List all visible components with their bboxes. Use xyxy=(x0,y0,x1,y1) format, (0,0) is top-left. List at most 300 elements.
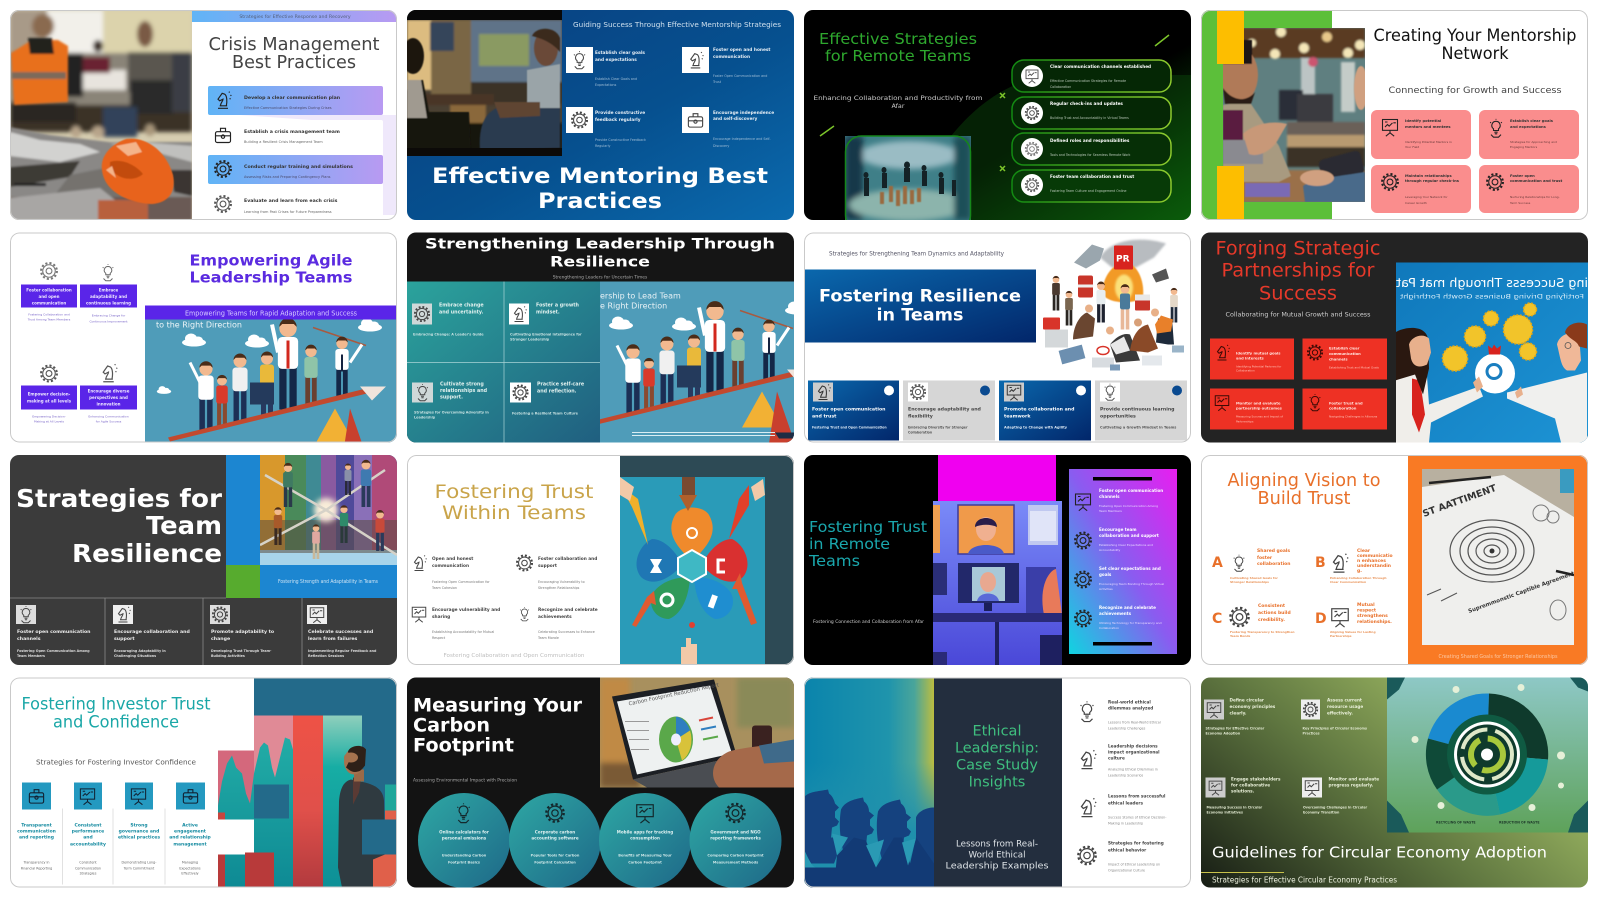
item: lessons: Lessons from successful xyxy=(1108,794,1166,798)
item: collaboration: Trust Among Team Members xyxy=(27,318,71,322)
item B: clear communication: understandin xyxy=(1357,563,1391,569)
item: stakeholders xyxy=(1206,776,1281,814)
item: governance: Term Commitment xyxy=(123,866,155,870)
item: outcomes: Measuring Success and Impact of xyxy=(1236,414,1284,418)
item: collaboration: Encourage collaboration and xyxy=(114,629,190,635)
subtitle: Connecting for Growth and Success xyxy=(1388,86,1562,96)
item: celebrate: Celebrate successes and xyxy=(308,629,373,635)
item: dilemmas: Real-world ethical xyxy=(1108,700,1151,704)
title: Resilience xyxy=(72,539,222,568)
item: change: Embrace change xyxy=(439,302,484,308)
item: trust: Navigating Challenges in Alliances xyxy=(1329,414,1378,418)
item: communication xyxy=(1302,338,1387,380)
item D: mutual respect: Aligning Values for Lasting xyxy=(1330,630,1376,634)
photo: mentor and mentee by a window xyxy=(407,10,562,156)
title: Effective Mentoring Best xyxy=(432,164,768,189)
item: mentors xyxy=(1371,110,1471,159)
title: for Remote Teams xyxy=(825,47,971,65)
item: goals: and expectations xyxy=(595,57,637,63)
item: define principles: Strategies for Effective Circular xyxy=(1206,726,1265,730)
subtitle: Fostering Strength and Adaptability in Teams xyxy=(278,579,378,585)
item A: shared goals: Shared goals xyxy=(1257,548,1290,554)
item: adaptability: Continuous Improvement xyxy=(89,320,128,324)
illustration: team on a rising arrow xyxy=(145,320,397,442)
item: growth mindset: Stronger Leadership xyxy=(510,338,550,342)
item: mentors: Your Field xyxy=(1405,145,1419,149)
illustration: video call desk scene xyxy=(933,501,1062,665)
item: governance: Demonstrating Long- xyxy=(122,860,157,864)
item: communication: channels xyxy=(1329,358,1348,362)
item: corporate software: Corporate carbon xyxy=(535,830,575,834)
item: achievements: Team Morale xyxy=(537,636,559,640)
item: strategies: Strategies for fostering xyxy=(1108,840,1164,846)
illustration: team on a rising arrow: to the Right Direction xyxy=(156,320,242,330)
strategies panel xyxy=(1069,469,1177,654)
item: adaptability: Building Activities xyxy=(211,654,245,658)
title: Insights xyxy=(969,774,1025,790)
item: honest communication xyxy=(414,556,490,590)
item: adaptability: Promote adaptability to xyxy=(211,629,275,635)
image: silhouettes on gradient xyxy=(804,678,934,888)
item: stakeholders: Economy Initiatives xyxy=(1206,810,1243,814)
subtitle: Strategies for Fostering Investor Confidence xyxy=(36,758,196,766)
item: honest communication: Team Cohesion xyxy=(431,586,457,590)
item: performance: Communication xyxy=(75,866,101,870)
item: growth mindset: Foster a growth xyxy=(536,302,580,308)
item: define principles: economy principles xyxy=(1230,704,1276,709)
item: decisions: Empower decision- xyxy=(28,392,71,396)
panel: Fostering Trust Within Teams slide xyxy=(407,455,794,665)
panel: Fostering Trust in Remote Teams slide xyxy=(804,455,1191,665)
item: goals: Establish Clear Goals and xyxy=(595,77,637,81)
item: achievements: achievements xyxy=(1099,611,1132,616)
item: online calculators: Understanding Carbon xyxy=(442,854,487,858)
item: online calculators: Footprint Basics xyxy=(448,860,480,864)
item: celebrate: learn from failures xyxy=(308,636,358,642)
item: goals xyxy=(566,47,645,87)
panel: Guidelines for Circular Economy Adoption slide xyxy=(1201,678,1588,888)
item: self-care: Practice self-care xyxy=(537,382,585,388)
item: performance: Consistent xyxy=(74,822,102,828)
item: corporate software: Popular Tools for Carbon xyxy=(531,854,580,858)
subtitle: Fostering Connection and Collaboration from Afar xyxy=(813,619,924,625)
item B: clear communication: Clear xyxy=(1357,548,1371,554)
item: achievements xyxy=(1075,605,1162,630)
photo: man in conversation in a cafe xyxy=(1223,28,1365,202)
title: Resilience xyxy=(550,254,650,270)
item: expectations: Set clear expectations and xyxy=(1099,566,1161,571)
item: learning: opportunities xyxy=(1100,414,1136,420)
item B: clear communication xyxy=(1315,548,1393,584)
item: communication: Establishing Trust and Mutual Goals xyxy=(1329,366,1379,370)
item: communication: Foster open communication xyxy=(17,629,91,635)
item: adaptability: Collaboration xyxy=(908,430,933,434)
item: crisis team xyxy=(214,120,383,144)
item: goals: Establish clear goals xyxy=(595,50,645,56)
item: assess resources: Assess current xyxy=(1327,698,1362,702)
item: collaboration xyxy=(517,555,597,590)
item: assess resources: effectively. xyxy=(1327,710,1353,716)
item: mentors: Identifying Potential Mentors in xyxy=(1405,140,1452,144)
item: collaboration: support xyxy=(114,636,135,642)
infographic image: circular economy wheel: RECYCLING OF WASTE xyxy=(1436,820,1476,824)
item: achievements: Recognize and celebrate xyxy=(1099,605,1156,610)
item: monitor progress xyxy=(1302,776,1379,814)
subtitle band: Empowering Teams for Rapid Adaptation and Success xyxy=(185,310,357,318)
item: lessons xyxy=(1082,794,1167,826)
item C: consistent actions xyxy=(1212,603,1294,638)
item: adaptability: Embracing Change for xyxy=(92,314,126,318)
item: evaluate xyxy=(214,195,338,214)
panel: Fostering Resilience in Teams slide xyxy=(804,232,1191,442)
item: collaboration: Foster collaboration xyxy=(26,288,72,292)
item: performance: Consistent xyxy=(79,860,97,864)
panel: Creating Your Mentorship Network slide xyxy=(1201,10,1588,220)
item: decisions xyxy=(21,366,77,424)
item D: mutual respect: D xyxy=(1315,611,1327,627)
item: achievements: achievements xyxy=(538,614,572,620)
item: collaboration: Establishing Clear Expectations and xyxy=(1099,543,1153,547)
item: relationships xyxy=(412,382,489,420)
item C: consistent actions: Fostering Transparency to Strengthen xyxy=(1230,630,1294,634)
item: communication: Team Members xyxy=(17,654,45,658)
item: teamwork: teamwork xyxy=(1004,414,1031,420)
item: communication: Team Members xyxy=(1098,509,1122,513)
item: goals xyxy=(1479,110,1579,159)
item: define principles: clearly. xyxy=(1230,710,1247,716)
item: reporting: Transparency in xyxy=(22,860,50,864)
item: relationships: Strategies for Overcoming Adversity in xyxy=(414,410,489,414)
item: engagement: engagement xyxy=(174,828,207,834)
item: self-care: and reflection. xyxy=(537,388,577,394)
item: decisions: making at all levels xyxy=(27,398,72,404)
item: communication: Fostering Trust and Open Communication xyxy=(812,426,887,430)
panel: Crisis Management Best Practices slide xyxy=(10,10,397,220)
item: goals: and expectations xyxy=(1510,125,1547,129)
item: lessons: Success Stories of Ethical Decision- xyxy=(1108,816,1167,820)
item: collaboration: Encouraging Vulnerability to xyxy=(538,580,585,584)
item: relationships: Cultivate strong xyxy=(440,382,484,388)
item: vulnerability: sharing xyxy=(432,614,450,620)
item B: clear communication: g. xyxy=(1357,569,1362,574)
subtitle: Leadership Examples xyxy=(946,862,1049,872)
item: communication xyxy=(16,605,91,658)
illustration: partners holding a gear ball xyxy=(1396,262,1588,442)
item: achievements: Recognize and celebrate xyxy=(538,607,598,613)
item: training xyxy=(208,155,383,184)
panel: Ethical Leadership Case Study Insights slide xyxy=(804,678,1191,888)
item: celebrate xyxy=(307,605,377,658)
item: collaboration: Fostering Collaboration and xyxy=(28,312,70,316)
item: honest communication: Open and honest xyxy=(432,556,473,562)
teal strategies panel xyxy=(407,282,600,442)
item: goals: Strategies for Approaching and xyxy=(1510,140,1557,144)
item C: consistent actions: Team Bonds xyxy=(1230,634,1251,638)
item: self-care: Fostering a Resilient Team Culture xyxy=(512,412,579,416)
item: teamwork xyxy=(999,380,1091,440)
subtitle: Lessons from Real- xyxy=(956,840,1038,850)
title: Footprint xyxy=(413,736,514,756)
item: outcomes: Monitor and evaluate xyxy=(1236,402,1281,406)
item: relationships: Leadership xyxy=(414,416,436,420)
item: outcomes: partnership outcomes xyxy=(1236,406,1283,410)
item: lessons: Making in Leadership xyxy=(1108,822,1143,826)
item: reporting: communication xyxy=(17,828,56,834)
item: growth mindset: Cultivating Emotional Intelligence for xyxy=(510,332,582,336)
item: communication: channels xyxy=(1099,494,1120,499)
item: check-ins xyxy=(1012,97,1171,129)
item: adaptability: Encourage adaptability and xyxy=(908,406,981,412)
item: assess resources: resource usage xyxy=(1327,704,1363,709)
item: celebrate: Reflection Sessions xyxy=(308,654,344,658)
item: feedback: Regularly xyxy=(595,144,611,148)
title: Team xyxy=(146,511,222,540)
title: Teams xyxy=(808,552,860,570)
panel: Fostering Investor Trust and Confidence slide xyxy=(10,678,397,888)
item: check-ins: Career Growth xyxy=(1405,201,1427,205)
item: communication: Fostering Open Communication Among xyxy=(17,649,90,653)
title block: in Teams xyxy=(876,306,964,326)
illustration: team on a rising arrow: e Right Direction xyxy=(600,302,667,310)
item: honest communication: Fostering Open Communication for xyxy=(432,580,490,584)
title: Network xyxy=(1442,44,1509,63)
item: independence: and self-discovery xyxy=(713,116,757,122)
item C: consistent actions: actions build xyxy=(1258,610,1291,616)
item: adaptability: adaptability and xyxy=(90,294,127,299)
illustration: team on a rising arrow xyxy=(600,282,794,442)
photo: figures on a chess board in fog xyxy=(845,136,971,220)
item: trust: Foster trust and xyxy=(1329,402,1363,406)
item: reporting frameworks xyxy=(690,793,782,888)
subtitle: World Ethical xyxy=(968,850,1026,860)
item: trust: collaboration xyxy=(1329,406,1357,410)
photo: sketched trust agreement on paper: Supremmonstic Captible Agreement xyxy=(1468,571,1576,615)
item: goals: Identifying Potential Partners for xyxy=(1236,364,1282,368)
item: learning: Cultivating a Growth Mindset in Teams xyxy=(1100,426,1176,430)
item: check-ins: Regular check-ins and updates xyxy=(1050,101,1123,106)
photo: laptop showing a carbon footprint report xyxy=(600,678,794,788)
item: performance: performance xyxy=(72,828,104,834)
item B: clear communication: n enhances xyxy=(1357,558,1386,564)
item: monitor progress: Overcoming Challenges in Circular xyxy=(1303,806,1367,810)
item D: mutual respect: Partnerships xyxy=(1330,634,1352,638)
item B: clear communication: B xyxy=(1315,555,1326,571)
item: adaptability xyxy=(903,380,995,440)
photo: laptop showing a carbon footprint report: Carbon Footprint Reduction Report xyxy=(628,682,719,707)
item: stakeholders: Measuring Success in Circular xyxy=(1206,806,1263,810)
item: online calculators: personal emissions xyxy=(442,836,487,840)
item: adaptability: Developing Trust Through Team- xyxy=(211,649,272,653)
item: relationships: support. xyxy=(440,394,463,400)
item: decisions: impact organizational xyxy=(1108,750,1160,754)
item: engagement xyxy=(169,782,212,876)
item: feedback: feedback regularly xyxy=(595,117,641,123)
orange side panel xyxy=(1408,455,1588,665)
photo: sketched trust agreement on paper xyxy=(1422,469,1574,645)
item: channels: Clear communication channels established xyxy=(1050,64,1151,69)
item: engagement: Effectively xyxy=(181,872,199,876)
decorative lavender backdrop xyxy=(240,115,397,215)
item: define principles: Define circular xyxy=(1230,698,1265,702)
item: strategies: Organizational Culture xyxy=(1108,868,1145,872)
illustration: crisis scene with PR sign and fire: PR xyxy=(1116,254,1130,264)
subtitle band xyxy=(145,306,397,320)
item: evaluate: Evaluate and learn from each crisis xyxy=(244,198,338,204)
item: collaboration: collaboration and support xyxy=(1099,533,1159,538)
title: Leadership Teams xyxy=(190,268,353,286)
subtitle: Strategies for Strengthening Team Dynamics and Adaptability xyxy=(829,252,1005,258)
illustration: partners holding a gear ball: Fortifying Driving Business Growth Forthright xyxy=(1399,292,1584,300)
item: goals: Engaging Mentors xyxy=(1510,145,1538,149)
item: strategies: Impact of Ethical Leadership on xyxy=(1108,862,1160,866)
item: diversity: innovation xyxy=(96,402,121,406)
item: reporting frameworks: Government and NGO xyxy=(710,830,761,834)
title: Build Trust xyxy=(1258,489,1351,509)
item: online calculators xyxy=(418,793,510,888)
item: check-ins: Maintain relationships xyxy=(1405,174,1452,178)
item: check-ins xyxy=(1371,165,1471,213)
item: vulnerability: Establishing Accountability for Mutual xyxy=(432,630,494,634)
item: reporting frameworks: Comparing Carbon Footprint xyxy=(707,854,764,858)
item: relationships: relationships and xyxy=(440,388,488,394)
item: communication plan xyxy=(208,86,383,115)
item: independence: Encourage independence xyxy=(713,110,774,116)
green block xyxy=(1201,10,1332,220)
item: learning xyxy=(1095,380,1187,440)
infographic image: circular economy wheel xyxy=(1387,678,1588,832)
item: roles xyxy=(1012,133,1171,165)
item: communication: and trust xyxy=(812,414,837,420)
item: reporting frameworks: reporting frameworks xyxy=(710,836,761,840)
illustration: hands and colored petals around a hexagon xyxy=(620,477,765,664)
panel: Forging Strategic Partnerships for Success slide xyxy=(1201,232,1588,442)
title: Within Teams xyxy=(442,502,586,524)
item: channels: Effective Communication Strategies for Remote xyxy=(1050,79,1126,83)
illustration: partners holding a gear ball: ing Successs Through mat Pat xyxy=(1396,275,1588,290)
item: goals: Expectations xyxy=(595,83,617,87)
item: adaptability: flexibility xyxy=(908,414,933,420)
item: reporting xyxy=(17,782,56,870)
photo: blurred crisis workers and orange bag xyxy=(10,10,192,220)
item: trust xyxy=(1302,388,1387,430)
item: performance: Strategies xyxy=(80,872,97,876)
item: communication plan: Develop a clear communication plan xyxy=(244,95,340,101)
item: roles: Tools and Technologies for Seamless Remote Work xyxy=(1049,153,1131,157)
item D: mutual respect xyxy=(1315,602,1392,638)
title: Creating Your Mentorship xyxy=(1374,26,1576,45)
item: strategies xyxy=(1078,840,1164,872)
item: reporting: Financial Reporting xyxy=(21,866,52,870)
item A: shared goals: collaboration xyxy=(1257,561,1290,567)
title: Guidelines for Circular Economy Adoption xyxy=(1212,844,1547,862)
title: Empowering Agile xyxy=(190,252,352,270)
item: diversity: Encourage diverse xyxy=(88,388,130,394)
item: independence: Discovery xyxy=(713,144,729,148)
item: assess resources: Key Principles of Circular Economy xyxy=(1302,726,1368,730)
slate side panel xyxy=(620,455,794,665)
item: collaboration: Challenging Situations xyxy=(114,654,156,658)
title: Effective Strategies xyxy=(819,30,977,48)
item: decisions xyxy=(1082,744,1160,778)
photo: sketched trust agreement on paper: ST AATTIMENT xyxy=(1421,483,1499,520)
item: mentors: Identify potential xyxy=(1405,119,1441,123)
item: decisions: Empowering Decision- xyxy=(32,414,66,418)
item: channels xyxy=(1012,60,1171,92)
item: goals: Establish clear goals xyxy=(1510,119,1554,123)
item: teamwork: Promote collaboration and xyxy=(1004,406,1074,412)
item: trust: Foster open xyxy=(1510,174,1535,178)
item: goals xyxy=(1210,338,1294,380)
item: mobile apps: Benefits of Measuring Your xyxy=(618,854,672,858)
title block xyxy=(804,270,1036,342)
item: roles: Defined roles and responsibilities xyxy=(1050,138,1130,143)
item C: consistent actions: C xyxy=(1212,611,1222,627)
item: communication: Foster open and honest xyxy=(713,47,770,53)
color blocks xyxy=(226,455,397,598)
item: check-ins: Leveraging Your Network for xyxy=(1405,195,1448,199)
item: collaboration: support xyxy=(538,563,557,569)
item: monitor progress: Monitor and evaluate xyxy=(1328,776,1379,782)
item: feedback xyxy=(566,107,646,148)
panel: Strengthening Leadership Through Resilience slide xyxy=(407,232,829,446)
item: governance xyxy=(118,782,160,870)
item: achievements: Celebrating Successes to Enhance xyxy=(538,630,595,634)
item: collaboration: Foster team collaboration and trust xyxy=(1050,174,1134,179)
item: governance: ethical practices xyxy=(118,834,160,840)
item: decisions: Making at All Levels xyxy=(34,420,64,424)
item: decisions: Leadership Scenarios xyxy=(1108,774,1144,778)
item: governance: Strong xyxy=(130,822,148,828)
item: decisions: Analyzing Ethical Dilemmas in xyxy=(1108,768,1158,772)
item: governance: governance and xyxy=(119,828,159,834)
title: Forging Strategic xyxy=(1216,238,1380,260)
item: define principles xyxy=(1204,698,1276,736)
item: assess resources: Practices xyxy=(1302,732,1320,736)
item: communication: communication xyxy=(1329,352,1361,356)
item: independence: Encourage Independence and Self- xyxy=(713,137,771,141)
item: mobile apps: consumption xyxy=(630,836,660,840)
title: and Confidence xyxy=(53,712,179,732)
item: outcomes xyxy=(1210,388,1294,430)
item: communication xyxy=(682,47,770,84)
item: feedback: Provide Constructive Feedback xyxy=(595,138,646,142)
item: monitor progress: Economy Transition xyxy=(1303,810,1340,814)
item: assess resources xyxy=(1301,698,1368,736)
item A: shared goals: A xyxy=(1212,555,1223,571)
item: expectations xyxy=(1075,566,1164,591)
item: communication: Fostering Open Communication Among xyxy=(1099,504,1158,508)
item: reporting: Transparent xyxy=(21,822,53,828)
item: strategies: ethical behavior xyxy=(1108,848,1147,852)
item: online calculators: Online calculators for xyxy=(439,830,489,834)
item: change: and uncertainty. xyxy=(439,310,484,316)
item: decisions: Leadership decisions xyxy=(1108,744,1158,748)
item: collaboration xyxy=(1012,170,1171,202)
item: independence xyxy=(682,107,774,148)
subtitle: Collaborating for Mutual Growth and Success xyxy=(1226,312,1370,318)
item: collaboration: communication xyxy=(32,300,66,306)
item: collaboration xyxy=(1075,527,1159,552)
title: Crisis Management xyxy=(208,34,380,55)
item: stakeholders: Engage stakeholders xyxy=(1231,776,1281,782)
item: evaluate: Learning from Past Crises for Future Preparedness xyxy=(244,210,332,214)
item: trust: Nurturing Relationships for Long- xyxy=(1510,195,1560,199)
item: check-ins: through regular check-ins xyxy=(1405,179,1460,183)
item: mobile apps: Carbon Footprint xyxy=(628,860,662,864)
item: adaptability xyxy=(80,264,137,324)
title: Fostering Trust xyxy=(434,481,594,503)
item B: clear communication: Clear Communication xyxy=(1330,580,1366,584)
